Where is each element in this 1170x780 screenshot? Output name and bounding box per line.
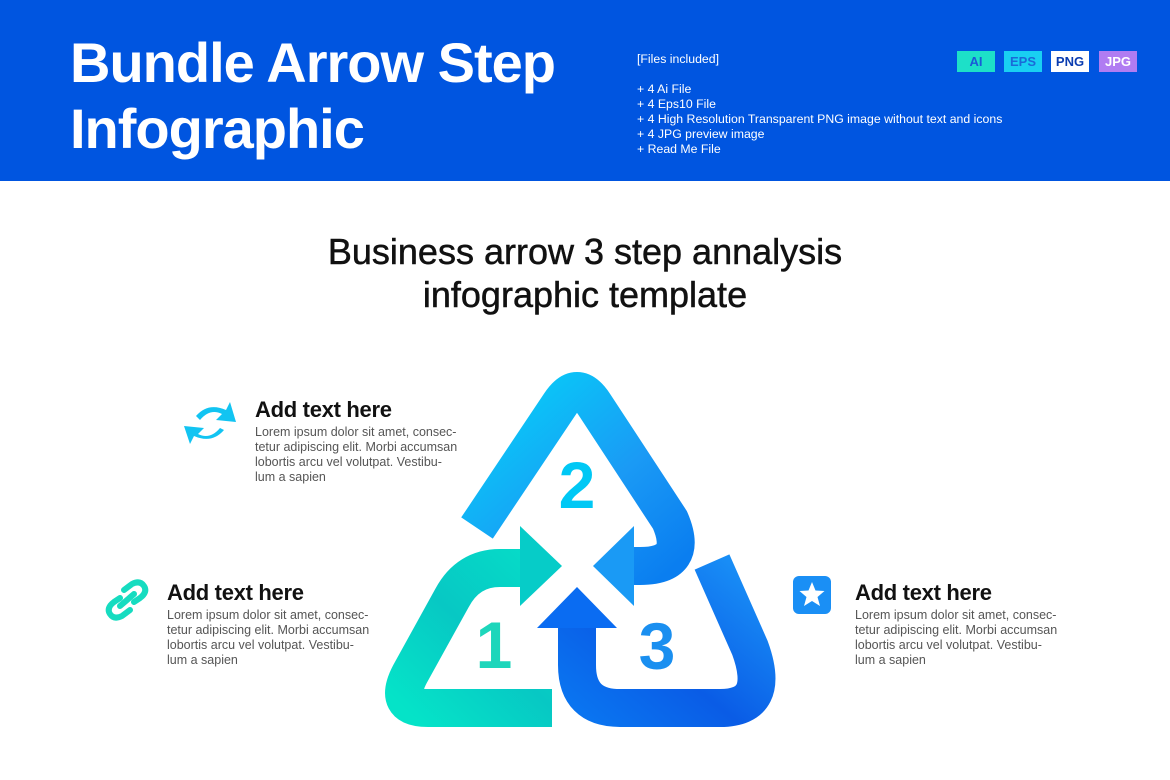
text block: top left: lum a sapien [255,470,326,484]
text block: top left [255,397,457,484]
icon: chain link [106,579,148,621]
files included list: [Files included] [637,52,719,66]
number 3: 3 [639,609,675,683]
text block: top left: lobortis arcu vel volutpat. Vestibu- [255,455,442,469]
number 1: 1 [476,608,512,682]
subtitle [328,231,842,315]
files included list: + 4 Ai File [637,82,691,96]
badge AI [957,51,995,72]
badge PNG: PNG [1056,54,1084,69]
files included list [637,52,1002,156]
text block: bottom left: Lorem ipsum dolor sit amet, consec- [167,608,368,622]
badge JPG [1099,51,1137,72]
text block: right: tetur adipiscing elit. Morbi accumsan [855,623,1057,637]
badge PNG [1051,51,1089,72]
text block: top left: tetur adipiscing elit. Morbi accumsan [255,440,457,454]
text block: bottom left: tetur adipiscing elit. Morbi accumsan [167,623,369,637]
arrow 3 bottom right [537,562,757,708]
text block: right: lum a sapien [855,653,926,667]
text block: top left: Lorem ipsum dolor sit amet, consec- [255,425,456,439]
text block: bottom left: Add text here [167,580,304,605]
files included list: + Read Me File [637,142,721,156]
files included list: + 4 High Resolution Transparent PNG image without text and icons [637,112,1002,126]
text block: bottom left: lobortis arcu vel volutpat. Vestibu- [167,638,354,652]
subtitle: Business arrow 3 step annalysis [328,231,842,272]
text block: bottom left: lum a sapien [167,653,238,667]
files included list: + 4 JPG preview image [637,127,764,141]
title: Bundle Arrow Step [70,31,555,94]
number 2: 2 [559,448,595,522]
text block: top left: Add text here [255,397,392,422]
badge EPS: EPS [1010,54,1036,69]
header banner [0,0,1170,181]
arrow 1 bottom left [404,526,562,708]
text block: bottom left [167,580,369,667]
badge JPG: JPG [1105,54,1131,69]
icon: star badge [793,576,831,614]
text block: right: Lorem ipsum dolor sit amet, consec- [855,608,1056,622]
text block: right [855,580,1057,667]
subtitle: infographic template [423,274,747,315]
files included list: + 4 Eps10 File [637,97,716,111]
text block: right: Add text here [855,580,992,605]
arrow 2 top [477,391,676,606]
icon: refresh arrows [184,402,236,444]
text block: right: lobortis arcu vel volutpat. Vestibu- [855,638,1042,652]
badge EPS [1004,51,1042,72]
badge AI: AI [970,54,982,69]
title [70,31,555,160]
title: Infographic [70,97,364,160]
